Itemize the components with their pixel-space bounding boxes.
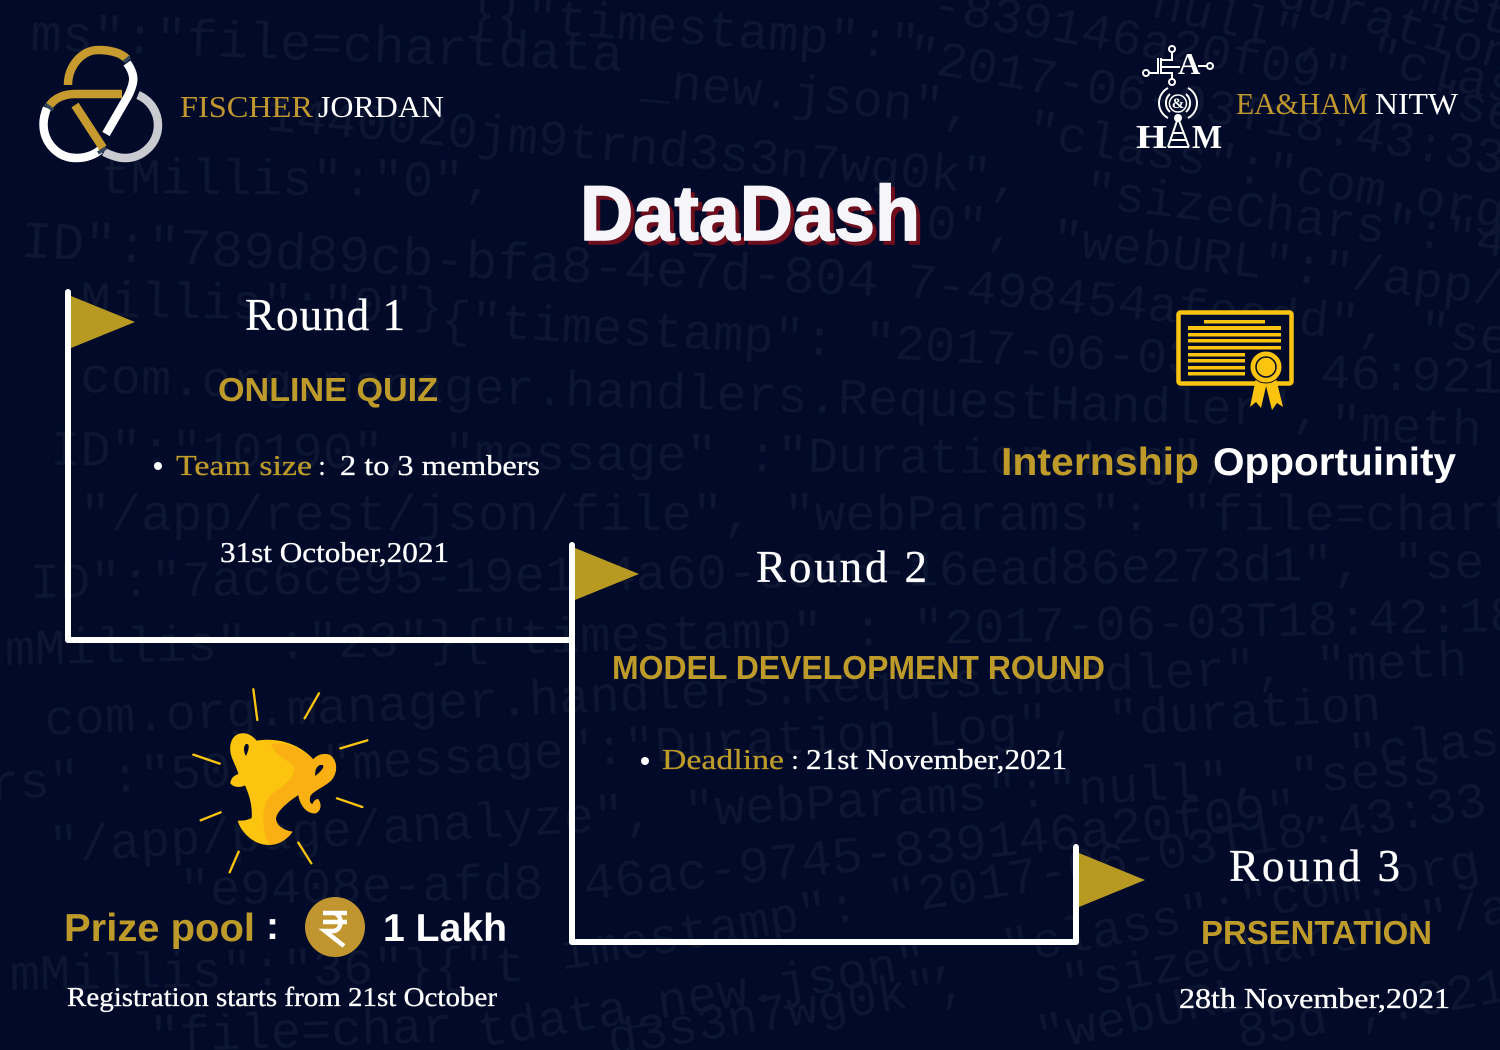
background code texture: 46:921 <box>1320 347 1500 409</box>
flag: round 3 <box>1079 853 1145 907</box>
icon: rupee coin <box>305 897 365 957</box>
icon: certificate <box>1178 312 1292 410</box>
background code texture: rs" :"50", "message":"Duration Log", "duration <box>0 679 1383 816</box>
panel: round 1: : <box>318 450 326 482</box>
logo: EA&HAM: H <box>1136 119 1167 156</box>
flag: round 2 <box>575 548 639 600</box>
background code texture: ID":"10190", "message" :"Duration Log", <box>50 424 1232 491</box>
background code texture: imestamp": "2017-06-03T18:43:33 <box>555 775 1491 986</box>
panel: round 3 <box>1179 841 1450 1015</box>
background code texture: _new.json", <box>638 55 976 141</box>
background code texture: com.org.manager.handlers.RequestHandler", "meth <box>43 634 1469 751</box>
heading: internship opportunity <box>1001 441 1456 484</box>
panel: round 1: 31st October,2021 <box>220 538 449 569</box>
prize pool label: : <box>266 905 279 948</box>
heading: internship opportunity: Internship <box>1001 441 1199 484</box>
background code texture: "sizeChars":"4 <box>1081 165 1500 274</box>
brand name: EA&HAM NITW: EA&HAM <box>1236 86 1368 121</box>
panel: round 2: MODEL DEVELOPMENT ROUND <box>612 649 1105 686</box>
prize amount: 1 Lakh <box>383 907 507 950</box>
background code texture: mMillis" :"23"}{"timestamp" : "2017-06-03T18:42:18 <box>4 590 1500 681</box>
background code texture: {"timestamp": "2017-06-03 <box>439 294 1199 391</box>
icon: trophy <box>193 689 367 872</box>
panel: round 3: 28th November,2021 <box>1179 983 1450 1015</box>
panel: round 2: Deadline <box>662 744 784 776</box>
panel: round 2: 21st November,2021 <box>806 744 1067 776</box>
panel: round 1: Team size <box>176 450 312 482</box>
background code texture: ID":"7ac6ce95-19e1-4a60-8646-16ead86e273d1", "se <box>29 537 1485 614</box>
logo: EA&HAM: A <box>1178 46 1201 81</box>
background code texture: "2017-06-03T18:43:33 <box>902 29 1500 190</box>
prize pool label: Prize pool <box>64 907 255 950</box>
background code texture: "webURL":"/app/ <box>1048 213 1500 321</box>
background code texture: "class":"com.org <box>1022 104 1500 244</box>
background code texture: Millis":"0"} <box>80 275 444 338</box>
logo: EA&HAM <box>1136 46 1222 156</box>
background code texture: 0", <box>924 197 1019 262</box>
flag: round 1 <box>71 296 135 348</box>
panel: round 3: PRSENTATION <box>1201 914 1432 951</box>
panel: round 1: 2 to 3 members <box>340 450 540 482</box>
logo: EA&HAM: & <box>1172 96 1184 112</box>
title: DataDash <box>584 173 924 261</box>
brand name: Fischer Jordan: FISCHER <box>180 89 313 124</box>
background code texture: tMillis":"0", <box>100 152 494 212</box>
brand name: EA&HAM NITW <box>1236 86 1459 121</box>
brand name: Fischer Jordan: JORDAN <box>318 89 444 124</box>
panel: round 2: : <box>791 744 799 776</box>
background code texture: ms":"file=chartdata <box>29 7 624 87</box>
registration note: Registration starts from 21st October <box>67 982 497 1012</box>
brand name: EA&HAM NITW: NITW <box>1375 86 1459 121</box>
background code texture: 7-498454afeedd", "se <box>903 256 1500 370</box>
panel: round 2 <box>612 542 1105 776</box>
logo: Fischer Jordan <box>44 50 158 158</box>
background code texture: "class":"com.org <box>998 836 1485 981</box>
logo: EA&HAM: M <box>1192 119 1222 156</box>
brand name: Fischer Jordan <box>180 89 444 124</box>
background code texture: "e9408e-afd8 <box>179 858 544 921</box>
panel: round 1: Round 1 <box>245 290 405 340</box>
heading: internship opportunity: Opportuinity <box>1213 441 1456 484</box>
panel: round 3: Round 3 <box>1229 841 1400 891</box>
panel: round 2: Round 2 <box>756 542 927 592</box>
panel: round 1 <box>154 290 540 569</box>
background code texture: mMillis":"36"}{"t <box>9 940 525 1006</box>
background code texture: "/app/page/analyze", "webParams":"null", "sess <box>48 743 1443 878</box>
timeline path <box>68 292 1076 942</box>
background code texture: "meth <box>1329 399 1483 461</box>
background code texture: 1440020jm9trnd3s3n7wg0k", <box>264 89 1023 212</box>
title: DataDash <box>580 169 920 257</box>
background code texture: com.org.manager.handlers.RequestHandler", <box>80 351 1323 443</box>
panel: round 1: ONLINE QUIZ <box>218 371 438 408</box>
background code texture: "/app/rest/json/file", "webParams": "file=chart <box>80 489 1500 546</box>
background code texture: "clas <box>1346 713 1500 786</box>
background code texture: 46ac-9745-839146a20f09", <box>581 779 1331 916</box>
background code texture: ID":"789d89cb-bfa8-4e7d-804 <box>19 213 880 312</box>
